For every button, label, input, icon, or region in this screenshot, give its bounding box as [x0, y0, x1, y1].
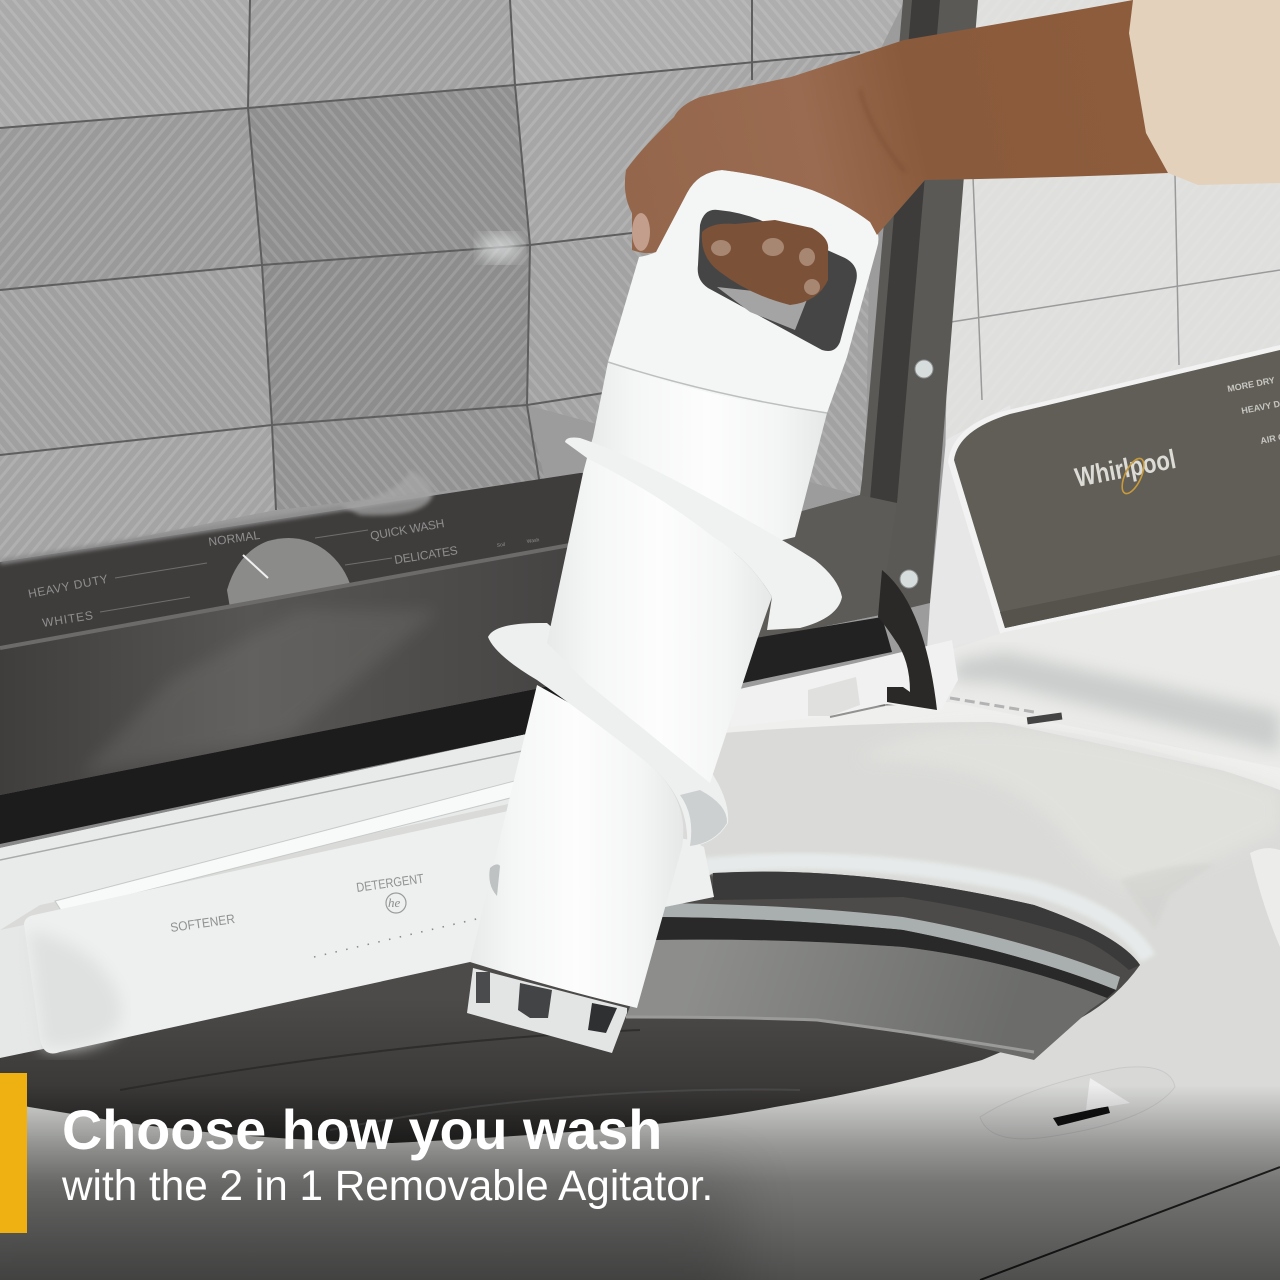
- he symbol: he: [388, 895, 400, 910]
- washer console behind the glass: [0, 470, 720, 795]
- sleeve: [1129, 0, 1280, 185]
- selector dial: [227, 538, 352, 620]
- console cycle labels: QUICK WASH: [369, 516, 445, 543]
- drum opening: [0, 861, 1148, 1143]
- console cycle labels: Soil: [496, 542, 506, 549]
- console cycle labels: WHITES: [41, 608, 94, 630]
- right washer console and top: [925, 345, 1280, 800]
- he symbol: [386, 893, 406, 913]
- wall tiles seen through the lid glass: [0, 0, 1280, 700]
- agitator handle: [608, 170, 878, 413]
- forearm and hand: [625, 0, 1168, 253]
- lower glass with reflection: [0, 520, 720, 795]
- agitator collar: [587, 362, 827, 560]
- bottom caption shade: [0, 1085, 1280, 1280]
- handle opening: [698, 210, 857, 351]
- wrist crease: [860, 90, 905, 172]
- console cycle labels: [27, 516, 540, 630]
- detergent dispenser drawer: [24, 808, 714, 1054]
- dryer console labels: MORE DRY: [1226, 375, 1276, 394]
- agitator lower barrel: [470, 685, 683, 1008]
- fingers in handle: [702, 220, 828, 305]
- thumb nail: [632, 213, 650, 251]
- deck control slot: [980, 1067, 1175, 1139]
- console cycle labels: DELICATES: [393, 543, 459, 567]
- whirlpool logo: Whirlpool: [1072, 444, 1178, 493]
- agitator foot: [467, 968, 627, 1053]
- console cycle labels: NORMAL: [207, 528, 261, 549]
- console cycle labels: HEAVY DUTY: [27, 572, 109, 601]
- hinge block and hinge: [730, 570, 1062, 727]
- washer deck: [0, 702, 1280, 1280]
- lower deck seam: [980, 1167, 1280, 1280]
- yellow accent bar: [0, 1073, 27, 1233]
- frame screws: [900, 360, 933, 588]
- lid frame: [757, 0, 978, 640]
- agitator lower fin: [488, 623, 728, 847]
- softener label: SOFTENER: [169, 911, 236, 935]
- caption heading: Choose how you wash: [62, 1099, 662, 1161]
- right wall tiles: [945, 0, 1280, 470]
- console cycle labels: Wash: [526, 537, 540, 545]
- drum lip: [705, 861, 1148, 958]
- detergent label: DETERGENT: [355, 871, 425, 895]
- agitator: [467, 170, 878, 1053]
- agitator upper fin: [565, 438, 842, 630]
- lower black gasket: [0, 635, 800, 844]
- agitator upper barrel: [547, 458, 772, 783]
- caption: [62, 1099, 713, 1209]
- caption subheading: with the 2 in 1 Removable Agitator.: [62, 1162, 713, 1209]
- black rail behind hinge: [743, 617, 892, 683]
- dryer console labels: [1226, 375, 1280, 446]
